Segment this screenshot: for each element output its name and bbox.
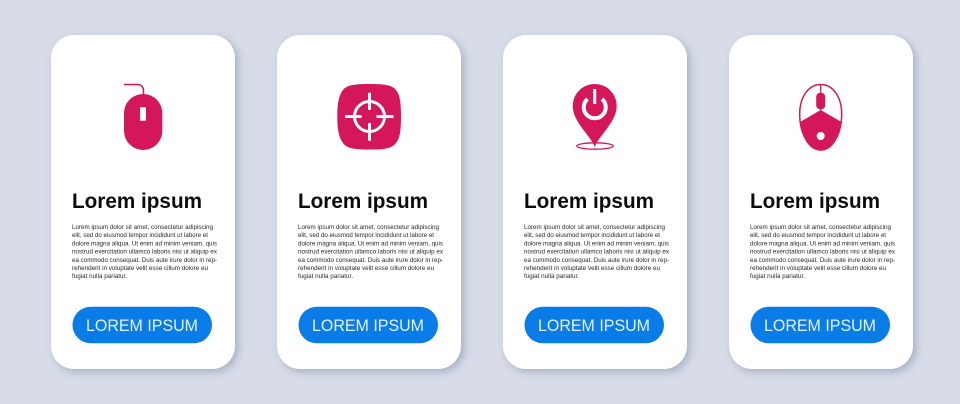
panel: card 1: [51, 35, 235, 369]
text block: card 3: fugiat nulla pariatur.: [524, 273, 579, 280]
text block: card 2: dolore magna aliqua. Ut enim ad minim veniam, quis: [298, 240, 444, 247]
panel: card 3: [503, 35, 687, 369]
text block: card 2: rehenderit in voluptate velit esse cillum dolore eu: [298, 265, 434, 272]
text block: card 3: Lorem ipsum dolor sit amet, consectetur adipiscing: [524, 224, 665, 231]
text block: card 1: elit, sed do eiusmod tempor incididunt ut labore et: [72, 232, 208, 239]
icon: mouse with scroll wheel: [800, 84, 842, 150]
icon: computer mouse: [124, 84, 162, 150]
panel: card 2: [277, 35, 461, 369]
heading: card 2: Lorem ipsum: [298, 190, 428, 213]
icon: crosshair target: [337, 84, 401, 150]
button: card 4: [750, 307, 890, 343]
text block: card 2: fugiat nulla pariatur.: [298, 273, 353, 280]
text block: card 1: fugiat nulla pariatur.: [72, 273, 127, 280]
text block: card 1: rehenderit in voluptate velit esse cillum dolore eu: [72, 265, 208, 272]
text block: card 4: nostrud exercitation ullamco laboris nisi ut aliquip ex: [750, 249, 896, 256]
heading: card 3: Lorem ipsum: [524, 190, 654, 213]
text block: card 1: Lorem ipsum dolor sit amet, consectetur adipiscing: [72, 224, 213, 231]
text block: card 3: rehenderit in voluptate velit esse cillum dolore eu: [524, 265, 660, 272]
text block: card 3: ea commodo consequat. Duis aute irure dolor in rep-: [524, 257, 669, 264]
icon: map pin with power symbol: [573, 84, 617, 149]
heading: card 1: Lorem ipsum: [72, 190, 202, 213]
text block: card 3: [524, 224, 670, 280]
text block: card 4: [750, 224, 896, 280]
text block: card 2: [298, 224, 444, 280]
text block: card 1: dolore magna aliqua. Ut enim ad minim veniam, quis: [72, 240, 218, 247]
text block: card 3: nostrud exercitation ullamco laboris nisi ut aliquip ex: [524, 249, 670, 256]
text block: card 1: nostrud exercitation ullamco laboris nisi ut aliquip ex: [72, 249, 218, 256]
button: card 2: LOREM IPSUM: [312, 316, 424, 335]
button: card 2: [298, 307, 438, 343]
text block: card 2: Lorem ipsum dolor sit amet, consectetur adipiscing: [298, 224, 439, 231]
text block: card 1: [72, 224, 218, 280]
text block: card 4: ea commodo consequat. Duis aute irure dolor in rep-: [750, 257, 895, 264]
text block: card 4: dolore magna aliqua. Ut enim ad minim veniam, quis: [750, 240, 896, 247]
button: card 1: LOREM IPSUM: [86, 316, 198, 335]
text block: card 1: ea commodo consequat. Duis aute irure dolor in rep-: [72, 257, 217, 264]
text block: card 4: Lorem ipsum dolor sit amet, consectetur adipiscing: [750, 224, 891, 231]
text block: card 2: nostrud exercitation ullamco laboris nisi ut aliquip ex: [298, 249, 444, 256]
panel: card 4: [729, 35, 913, 369]
button: card 1: [72, 307, 212, 343]
text block: card 4: elit, sed do eiusmod tempor incididunt ut labore et: [750, 232, 886, 239]
text block: card 2: elit, sed do eiusmod tempor incididunt ut labore et: [298, 232, 434, 239]
button: card 4: LOREM IPSUM: [764, 316, 876, 335]
button: card 3: [524, 307, 664, 343]
text block: card 4: rehenderit in voluptate velit esse cillum dolore eu: [750, 265, 886, 272]
text block: card 3: elit, sed do eiusmod tempor incididunt ut labore et: [524, 232, 660, 239]
text block: card 4: fugiat nulla pariatur.: [750, 273, 805, 280]
heading: card 4: Lorem ipsum: [750, 190, 880, 213]
text block: card 2: ea commodo consequat. Duis aute irure dolor in rep-: [298, 257, 443, 264]
text block: card 3: dolore magna aliqua. Ut enim ad minim veniam, quis: [524, 240, 670, 247]
button: card 3: LOREM IPSUM: [538, 316, 650, 335]
